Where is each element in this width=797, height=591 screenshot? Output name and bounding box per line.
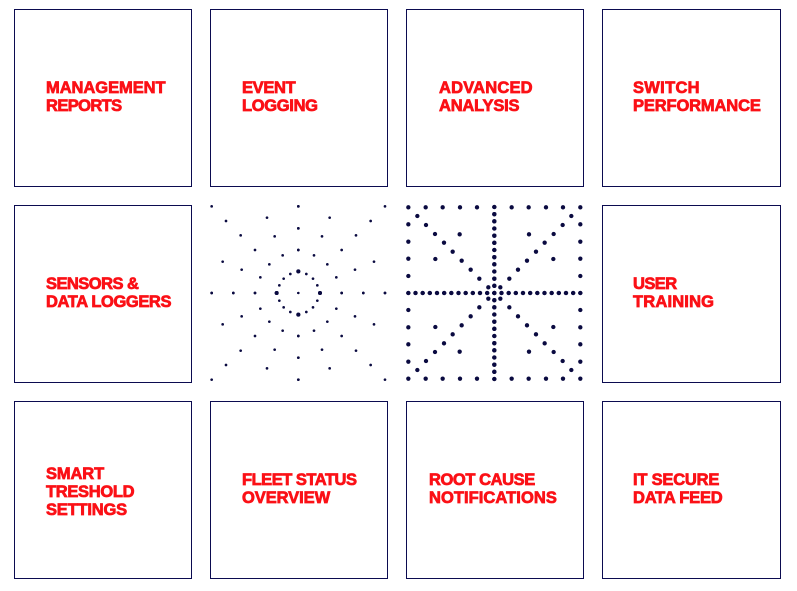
heading: advanced analysis: ANALYSIS [439, 97, 519, 115]
panel: smart treshold settings [14, 401, 192, 579]
panel: sensors and data loggers [14, 205, 192, 383]
heading: sensors and data loggers: DATA LOGGERS [46, 293, 171, 311]
panel: it secure data feed [602, 401, 781, 579]
heading: fleet status overview: OVERVIEW [242, 489, 330, 507]
heading: switch performance: PERFORMANCE [633, 97, 761, 115]
panel: root cause notifications [406, 401, 584, 579]
heading: fleet status overview: FLEET STATUS [242, 471, 357, 489]
heading: sensors and data loggers [46, 275, 172, 311]
dot pattern: large starburst [406, 204, 582, 382]
heading: sensors and data loggers: SENSORS & [46, 275, 138, 293]
heading: event logging [242, 79, 318, 115]
panel: management reports [14, 9, 192, 187]
heading: root cause notifications: ROOT CAUSE [429, 471, 535, 489]
heading: event logging: EVENT [242, 79, 295, 97]
heading: smart treshold settings: SMART [46, 465, 104, 483]
panel: fleet status overview [210, 401, 388, 579]
heading: user training: TRAINING [633, 293, 714, 311]
heading: switch performance: SWITCH [633, 79, 700, 97]
heading: advanced analysis [438, 79, 533, 115]
heading: root cause notifications [429, 471, 557, 507]
heading: management reports [46, 79, 166, 115]
dot pattern: small radial circle [210, 205, 386, 381]
panel: event logging [210, 9, 388, 187]
heading: it secure data feed [633, 471, 722, 507]
heading: management reports: MANAGEMENT [46, 79, 166, 97]
heading: user training: USER [633, 275, 677, 293]
panel: switch performance [602, 9, 781, 187]
heading: fleet status overview [242, 471, 357, 507]
heading: it secure data feed: IT SECURE [633, 471, 719, 489]
heading: switch performance [633, 79, 761, 115]
heading: event logging: LOGGING [242, 97, 318, 115]
panel: advanced analysis [406, 9, 584, 187]
heading: smart treshold settings: SETTINGS [46, 501, 127, 519]
heading: smart treshold settings [46, 465, 134, 519]
heading: it secure data feed: DATA FEED [633, 489, 722, 507]
heading: advanced analysis: ADVANCED [439, 79, 533, 97]
heading: user training [632, 275, 714, 311]
heading: smart treshold settings: TRESHOLD [46, 483, 134, 501]
heading: root cause notifications: NOTIFICATIONS [429, 489, 557, 507]
panel: user training [602, 205, 781, 383]
heading: management reports: REPORTS [46, 97, 122, 115]
